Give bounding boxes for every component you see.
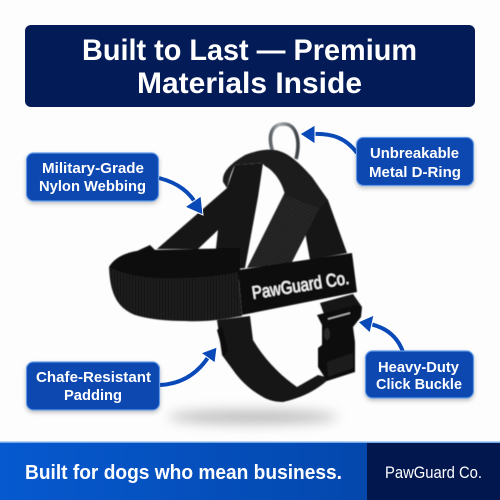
buckle hole xyxy=(324,328,330,340)
title banner xyxy=(25,25,475,107)
D-ring xyxy=(270,124,298,159)
callout: nylon webbing xyxy=(26,153,158,201)
callout: metal D-ring: Metal D-Ring xyxy=(369,164,461,181)
side release clip on inner band xyxy=(137,245,155,254)
arrow: to nylon webbing xyxy=(159,178,203,215)
callout: metal D-ring: Unbreakable xyxy=(370,145,459,162)
buckle slot highlight xyxy=(328,313,350,319)
footer brand block: PawGuard Co. xyxy=(385,463,482,482)
callout: click buckle xyxy=(366,351,474,398)
upper buckle webbing xyxy=(320,294,362,317)
footer brand block xyxy=(367,443,500,500)
belly strap xyxy=(217,316,330,402)
callout: nylon webbing: Nylon Webbing xyxy=(39,178,146,195)
middle chest strap xyxy=(215,163,263,272)
strap edge pad xyxy=(217,326,228,356)
arrow: to D-ring xyxy=(300,125,357,153)
yoke at top of harness xyxy=(223,150,328,208)
callout: click buckle: Click Buckle xyxy=(376,376,462,393)
callout: padding: Padding xyxy=(64,387,122,404)
title text xyxy=(82,34,417,100)
ground shadow xyxy=(168,410,338,424)
harness illustration xyxy=(109,124,362,402)
callout: padding: Chafe-Resistant xyxy=(36,369,151,386)
footer tagline: Built for dogs who mean business. xyxy=(25,462,342,484)
callout: click buckle: Heavy-Duty xyxy=(378,359,460,376)
padded belly band xyxy=(109,267,242,321)
arrow: to buckle xyxy=(358,315,403,352)
callout: padding xyxy=(26,362,160,410)
brand patch text: PawGuard Co. xyxy=(250,268,350,303)
title text: Built to Last — Premium xyxy=(82,34,417,67)
right chest strap xyxy=(247,192,320,268)
brand patch xyxy=(238,253,357,315)
click buckle xyxy=(317,305,362,381)
arrow: to padding xyxy=(160,347,217,385)
footer band xyxy=(0,442,500,500)
lower buckle webbing ridges xyxy=(327,353,353,377)
title text: Materials Inside xyxy=(137,67,362,100)
left shoulder strap xyxy=(157,188,232,249)
far right strap xyxy=(305,190,347,260)
callout: nylon webbing: Military-Grade xyxy=(42,160,144,177)
callout: metal D-ring xyxy=(356,138,474,186)
rear collar inner band xyxy=(109,248,240,280)
